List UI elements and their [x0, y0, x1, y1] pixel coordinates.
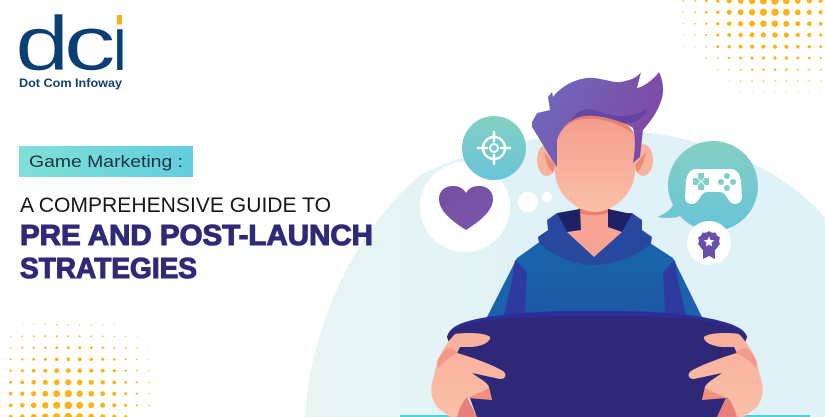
bottom strip	[400, 415, 810, 417]
heading: STRATEGIES	[20, 253, 197, 285]
speech bubble: gamepad	[657, 141, 758, 231]
sleeves	[487, 243, 702, 317]
logo	[15, 0, 127, 90]
icon: heart bubble	[420, 162, 510, 252]
hair	[532, 72, 663, 167]
logo: Dot Com Infoway	[19, 76, 122, 90]
left hand	[431, 333, 505, 417]
badge: Game Marketing	[19, 146, 193, 177]
heading: PRE AND POST-LAUNCH	[20, 220, 373, 252]
thought dots	[518, 192, 552, 212]
hood	[538, 213, 652, 265]
heading: A COMPREHENSIVE GUIDE TO	[20, 194, 331, 217]
icon: medal bubble	[687, 221, 731, 265]
logo: c	[64, 1, 116, 87]
badge: Game Marketing: Game Marketing :	[29, 152, 183, 171]
logo: d	[15, 0, 69, 87]
heading	[20, 194, 373, 285]
tablet	[447, 311, 747, 417]
face	[555, 115, 635, 212]
right hand	[689, 333, 763, 417]
icon: target bubble	[462, 116, 526, 180]
collar	[557, 209, 632, 232]
icon: gamepad	[685, 169, 742, 204]
logo: i	[113, 0, 127, 87]
forehead shadow	[558, 112, 634, 135]
dot pattern: top right	[672, 0, 823, 93]
ears	[537, 144, 653, 176]
neck shadow	[580, 208, 608, 215]
neck	[567, 205, 622, 257]
background blob	[305, 131, 825, 417]
character	[487, 72, 702, 317]
hair highlight	[570, 108, 648, 123]
hoodie body	[525, 245, 665, 315]
dot pattern: bottom left	[0, 324, 172, 417]
